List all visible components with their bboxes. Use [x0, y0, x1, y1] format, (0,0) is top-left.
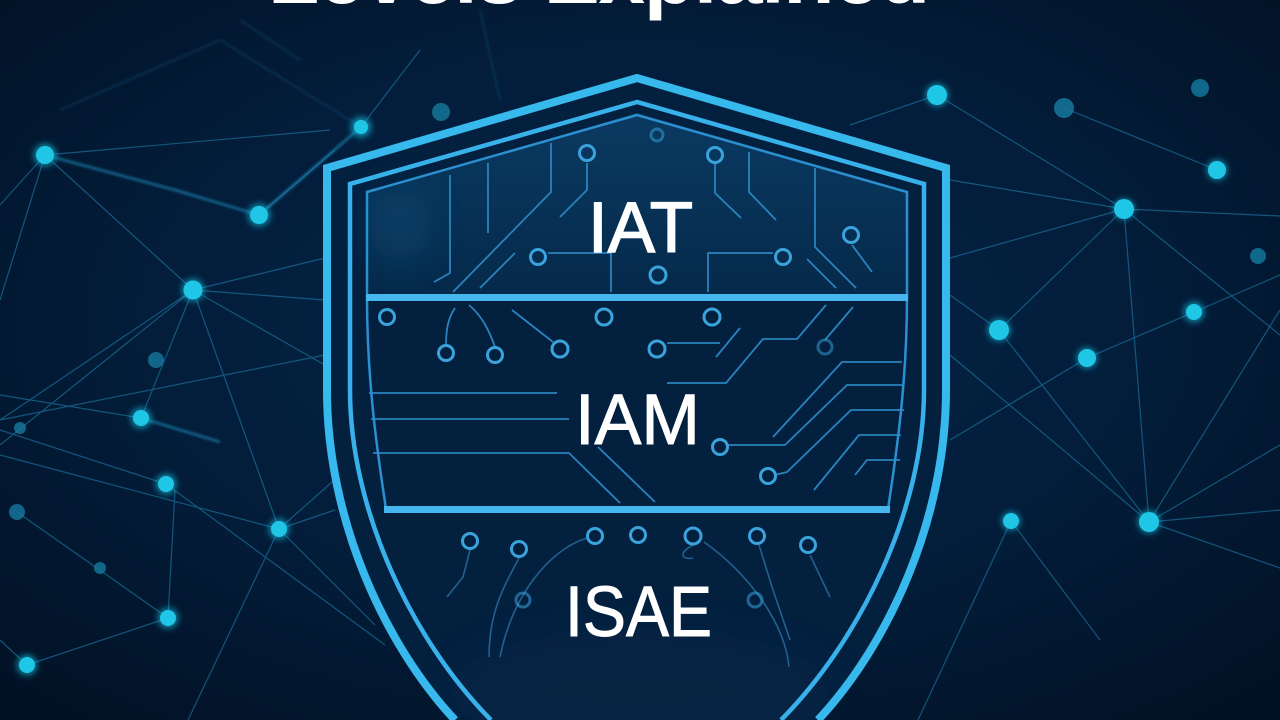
label: ISAE: ISAE: [565, 573, 712, 652]
network nodes left glow: [17, 117, 371, 675]
inner shield border: [367, 115, 907, 509]
network nodes left: [19, 120, 368, 673]
network: right side: [850, 79, 1280, 720]
divider bottom: [384, 506, 890, 513]
label: IAT: IAT: [588, 189, 693, 268]
lower dome shade: [450, 630, 830, 720]
dim nodes right: [1054, 79, 1266, 264]
dim nodes left: [9, 103, 450, 574]
label: IAM: IAM: [575, 381, 700, 460]
network: left side: [0, 10, 500, 720]
shield body fill: [327, 78, 946, 720]
network lines left: [0, 50, 420, 720]
faint lower traces: [447, 538, 830, 667]
network lines right: [850, 95, 1280, 720]
outer shield border: [327, 78, 946, 720]
circuit nodes: bottom section: [462, 528, 816, 607]
circuit nodes: top section: [530, 129, 858, 283]
divider top: [366, 294, 908, 301]
circuit nodes: middle section: [380, 309, 832, 484]
shield: [327, 78, 946, 720]
network nodes right glow: [926, 84, 1227, 533]
circuit traces: [369, 143, 904, 503]
top section highlight: [370, 190, 430, 260]
top section fill: [367, 113, 907, 297]
middle shield border: [350, 102, 924, 720]
network nodes right: [927, 85, 1226, 532]
faint distant lines: [60, 10, 500, 127]
thick connector: [45, 127, 361, 442]
